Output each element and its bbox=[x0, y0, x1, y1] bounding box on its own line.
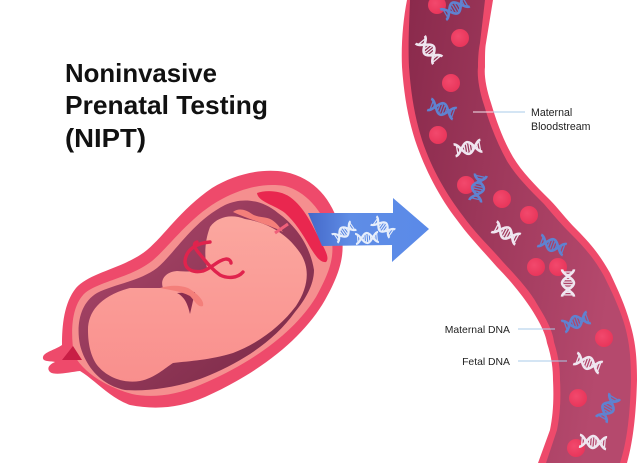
vessel wall bbox=[402, 0, 637, 463]
uterus with fetus bbox=[43, 171, 343, 408]
title: (NIPT) bbox=[65, 123, 146, 153]
arrow with fetal DNA bbox=[308, 198, 429, 262]
amniotic cavity bbox=[79, 200, 314, 390]
placenta bbox=[257, 191, 327, 262]
DNA fragments in bloodstream bbox=[416, 0, 620, 449]
title: Noninvasive bbox=[65, 58, 217, 88]
fetus limb gap bbox=[177, 292, 195, 314]
fetus hair detail bbox=[233, 210, 283, 232]
uterus inner band bbox=[72, 185, 332, 396]
umbilical stub bbox=[275, 224, 288, 233]
label: maternal bloodstream bbox=[473, 107, 591, 133]
arrow DNA bbox=[332, 216, 395, 244]
label: maternal DNA: Maternal DNA bbox=[445, 325, 510, 336]
red blood cells bbox=[428, 0, 613, 457]
fetus bbox=[88, 216, 307, 382]
title bbox=[65, 58, 268, 153]
title: Prenatal Testing bbox=[65, 90, 268, 120]
label: maternal DNA bbox=[445, 325, 555, 336]
label: maternal bloodstream: Bloodstream bbox=[531, 121, 591, 133]
fetus hand bbox=[160, 286, 203, 306]
cervix bbox=[62, 346, 82, 360]
umbilical cord bbox=[185, 242, 243, 277]
vessel lumen bbox=[409, 0, 631, 463]
label: fetal DNA: Fetal DNA bbox=[462, 357, 510, 368]
blood vessel bbox=[402, 0, 637, 463]
label: fetal DNA bbox=[462, 357, 567, 368]
label: maternal bloodstream: Maternal bbox=[531, 107, 572, 119]
uterus outer wall bbox=[43, 171, 343, 408]
arrow shape bbox=[308, 198, 429, 262]
